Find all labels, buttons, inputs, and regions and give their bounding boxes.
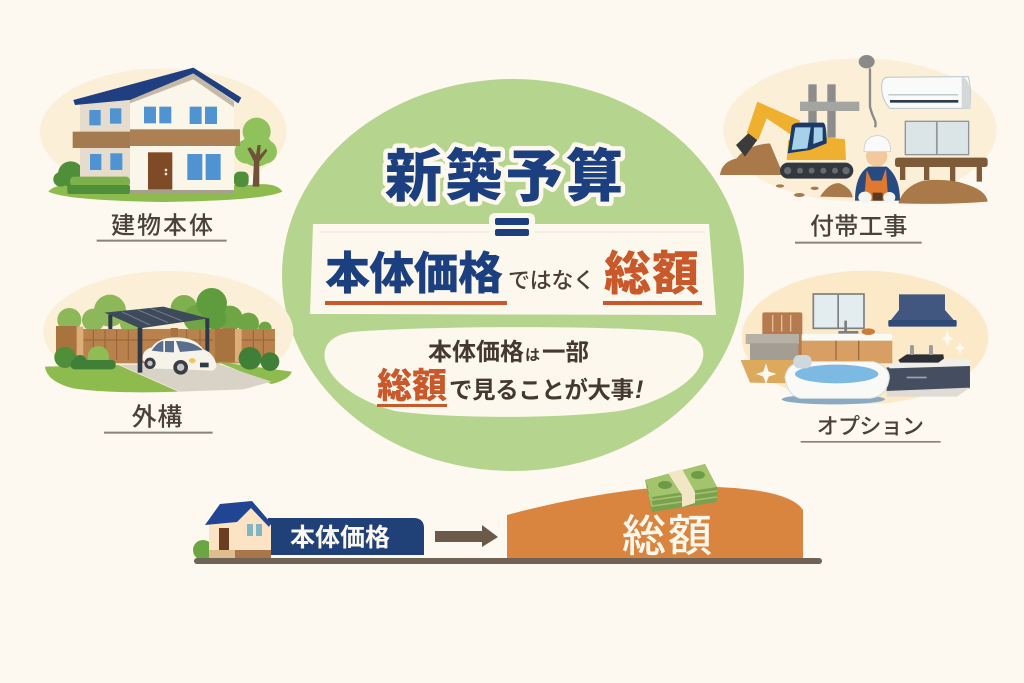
ground — [48, 184, 282, 202]
text: 総額: 総額 — [604, 247, 699, 300]
icon: money stack — [645, 464, 717, 512]
text: 本体価格は一部: 本体価格 — [428, 339, 524, 366]
panel: 建物本体 — [40, 68, 287, 242]
bar: 本体価格 — [268, 518, 424, 555]
text: 総額 emphasis: 総額 — [377, 367, 447, 406]
fence — [56, 326, 275, 363]
excavator — [736, 102, 853, 179]
window — [813, 294, 864, 328]
text: で見ることが大事!: で見ることが大事 — [449, 376, 634, 403]
shrubs — [54, 346, 279, 371]
exclamation mark: ! — [635, 376, 643, 404]
sparkles — [756, 330, 965, 384]
icon: small house — [193, 501, 271, 560]
dirt piles — [720, 143, 988, 204]
label: 建物本体: 建物本体 — [111, 212, 213, 239]
wood platform — [895, 158, 988, 182]
label underline — [795, 242, 922, 244]
label underline — [104, 432, 213, 434]
text: 本体価格: 本体価格 — [325, 248, 503, 299]
label: オプション: オプション — [817, 414, 924, 439]
text: 総額 label: 総額 — [622, 512, 712, 561]
worker — [855, 136, 900, 203]
window — [905, 121, 969, 155]
driveway — [120, 363, 272, 392]
label underline — [97, 240, 227, 242]
kitchen stove — [887, 345, 971, 397]
text: 本体価格 label: 本体価格 — [290, 524, 390, 552]
steel frame — [800, 84, 859, 138]
air conditioner — [882, 77, 971, 108]
laundry floor — [741, 360, 802, 383]
house — [73, 68, 241, 194]
text: ではなく: ではなく — [508, 268, 595, 293]
label underline — [801, 441, 941, 443]
equals sign — [489, 213, 535, 240]
shrubs — [53, 161, 249, 187]
mound: 総額 — [507, 486, 803, 560]
text: 本体価格は一部: は — [525, 347, 540, 364]
arrow — [435, 525, 498, 547]
tree — [235, 118, 277, 187]
lawn — [45, 362, 292, 392]
panel: bottom comparison — [193, 464, 822, 564]
label: 外構: 外構 — [132, 404, 182, 432]
label: 付帯工事: 付帯工事 — [810, 214, 907, 241]
panel: オプション — [741, 271, 988, 443]
trees — [57, 288, 272, 335]
text: 本体価格は一部: 一部 — [542, 339, 589, 365]
vanity counter — [802, 321, 892, 363]
underline: 総額 — [603, 301, 702, 305]
underline: 総額 emphasis — [377, 404, 447, 407]
panel: equation banner — [310, 213, 716, 315]
cupboard — [746, 312, 802, 360]
title: 新築予算: 新築予算 — [385, 145, 623, 209]
carport — [104, 307, 209, 373]
baseline — [194, 558, 822, 564]
panel: 付帯工事 — [720, 55, 997, 244]
panel: 外構 — [43, 271, 293, 434]
bathtub — [782, 355, 889, 404]
panel: message bubble — [324, 327, 703, 417]
panel: central green circle — [282, 79, 744, 471]
range hood — [888, 294, 957, 327]
shower — [859, 55, 876, 127]
hedge — [67, 177, 130, 194]
car — [143, 337, 217, 375]
underline: 本体価格 — [325, 301, 507, 305]
